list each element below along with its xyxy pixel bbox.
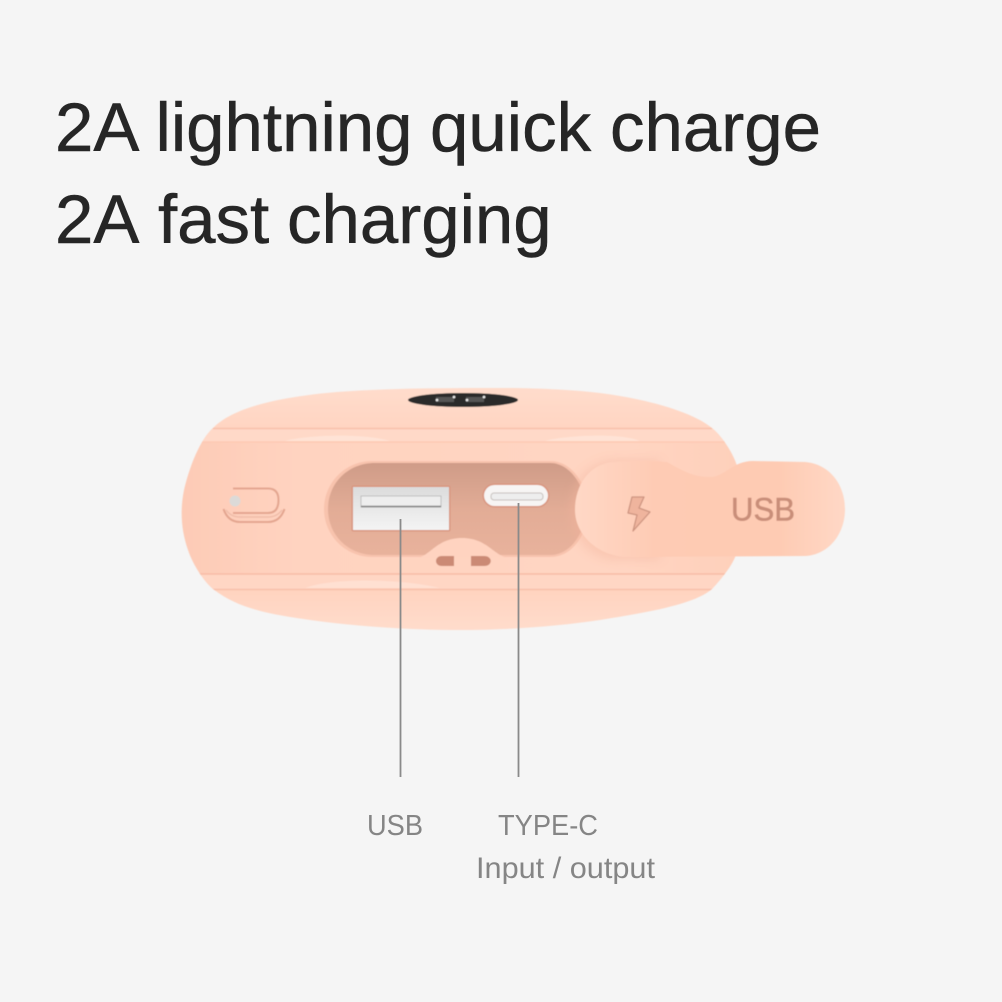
title line 2: fast xyxy=(158,181,269,258)
title line 2: 2A xyxy=(55,181,139,258)
upper seam band xyxy=(185,428,740,442)
leader line: USB xyxy=(400,519,402,777)
label: input / output: Input / output xyxy=(476,852,656,885)
infographic canvas xyxy=(58,100,846,884)
lower seam band xyxy=(185,574,740,590)
power switch xyxy=(224,488,284,522)
device top dome xyxy=(213,388,712,428)
display window xyxy=(408,393,518,407)
cable tab xyxy=(575,461,845,557)
tab USB marking: USB xyxy=(731,492,795,528)
title line 1: lightning xyxy=(156,89,413,166)
title line 1: charge xyxy=(610,89,821,166)
title xyxy=(55,89,821,258)
vent bump xyxy=(416,538,510,566)
Type-C port xyxy=(482,484,550,508)
title line 1: 2A xyxy=(55,89,139,166)
port recess xyxy=(324,461,588,557)
device middle band xyxy=(182,428,738,589)
label: TYPE-C: TYPE-C xyxy=(498,810,598,842)
power bank device xyxy=(182,388,845,630)
tab shadow on device xyxy=(580,460,653,560)
lightning icon xyxy=(628,497,650,531)
title line 1: quick xyxy=(430,89,592,166)
device bottom dome xyxy=(213,589,712,630)
leader line: Type-C xyxy=(518,503,520,777)
title line 2: charging xyxy=(287,181,552,258)
label: USB: USB xyxy=(367,810,423,842)
USB port xyxy=(352,486,450,532)
